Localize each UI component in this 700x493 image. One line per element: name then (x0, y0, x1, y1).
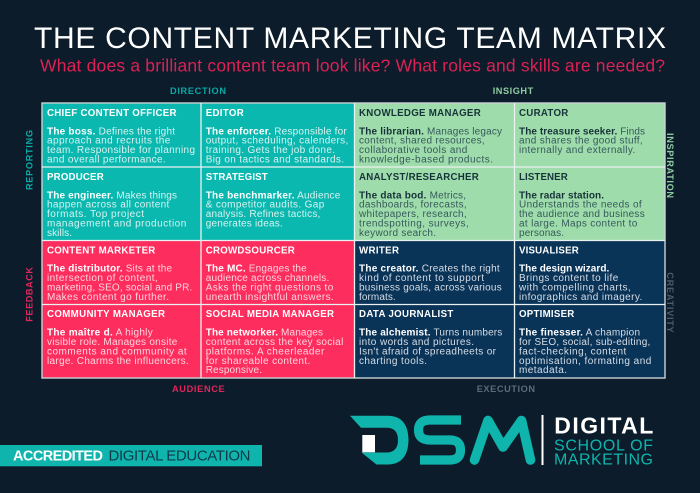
cell: content marketer: The distributor. Sits at the (47, 264, 172, 275)
cell: crowdsourcer: The MC. Engages the (206, 264, 307, 275)
quadrant: direction and reporting (42, 103, 354, 240)
cell: editor: output, scheduling, calenders, (206, 136, 348, 147)
cell: curator: CURATOR (519, 108, 568, 119)
cell: writer: kind of content to support (359, 273, 484, 284)
cell: optimiser: metadata. (519, 365, 567, 376)
cell: knowledge manager: knowledge-based products. (359, 154, 493, 166)
accreditation banner (0, 445, 262, 466)
cell: producer: The engineer. Makes things (47, 190, 177, 201)
cell: social media manager: content across the key social (206, 337, 343, 348)
cell: content marketer: intersection of content, (47, 273, 158, 284)
cell: listener: LISTENER (519, 172, 568, 183)
cell: knowledge manager: content, shared resources, (359, 136, 485, 147)
cell: crowdsourcer (206, 245, 334, 303)
cell: chief content officer: and overall performance. (47, 154, 166, 166)
cell: crowdsourcer: audience across channels. (206, 273, 329, 284)
cell: optimiser: for SEO, social, sub-editing, (519, 337, 650, 348)
cell: community manager: comments and community at (47, 346, 187, 358)
cell: data journalist: charting tools. (359, 356, 427, 367)
cell: strategist: STRATEGIST (206, 172, 268, 183)
cell: crowdsourcer: unearth insightful answers. (206, 292, 334, 303)
cell: producer: management and production (47, 218, 186, 229)
cell: visualiser: infographics and imagery. (519, 292, 642, 303)
cell: content marketer (47, 245, 192, 303)
axis label: audience: AUDIENCE (172, 384, 225, 394)
cell: strategist: The benchmarker. Audience (206, 190, 341, 201)
quadrant: insight and inspiration (354, 103, 665, 240)
cell: chief content officer: The boss. Defines the right (47, 126, 175, 138)
cell: producer: happen across all content (47, 200, 170, 211)
cell: social media manager: platforms. A cheerleader (206, 346, 325, 358)
cell: producer: PRODUCER (47, 172, 104, 183)
cell: visualiser: The design wizard. (519, 264, 610, 275)
axis label: feedback: FEEDBACK (25, 267, 35, 322)
cell: community manager: COMMUNITY MANAGER (47, 309, 165, 320)
cell: social media manager: for shareable content. (206, 356, 310, 367)
cell: listener: the audience and business (519, 209, 645, 220)
cell: editor: EDITOR (206, 108, 244, 119)
cell: chief content officer: team. Responsible for planning (47, 145, 195, 156)
quadrant: execution and creativity (354, 240, 665, 378)
cell: writer (359, 245, 502, 303)
cell: community manager: large. Charms the influencers. (47, 356, 189, 367)
axis label: reporting: REPORTING (25, 130, 35, 190)
cell: strategist: & competitor audits. Gap (206, 200, 325, 211)
axis label: inspiration: INSPIRATION (665, 133, 675, 198)
cell: writer: The creator. Creates the right (359, 264, 500, 275)
cell: social media manager (206, 309, 343, 376)
cell: producer (47, 172, 186, 239)
quadrant: audience and feedback (42, 240, 354, 378)
cell: editor: training. Gets the job done. (206, 145, 335, 156)
cell: data journalist: Isn't afraid of spreadheets or (359, 346, 497, 358)
axis label: execution: EXECUTION (477, 384, 535, 394)
cell: visualiser: VISUALISER (519, 245, 579, 256)
cell: strategist: generates ideas. (206, 218, 283, 229)
cell: analyst/researcher: keyword search. (359, 228, 436, 239)
cell: writer: business goals, across various (359, 282, 502, 294)
cell: crowdsourcer: Asks the right questions to (206, 282, 334, 294)
logo: digital school of marketing (350, 412, 653, 468)
cell: optimiser (519, 309, 651, 376)
logo: digital school of marketing: MARKETING (554, 452, 653, 468)
cell: knowledge manager: The librarian. Manages legacy (359, 126, 502, 138)
cell: optimiser: The finesser. A champion (519, 328, 640, 339)
axis label: creativity: CREATIVITY (665, 272, 675, 333)
cell: content marketer: CONTENT MARKETER (47, 245, 155, 256)
cell: strategist (206, 172, 341, 229)
cell: community manager (47, 309, 189, 367)
cell: visualiser: with compelling charts, (518, 282, 631, 294)
cell: content marketer: marketing, SEO, social and PR. (47, 282, 192, 294)
cell: optimiser: fact-checking, content (519, 346, 627, 358)
cell: optimiser: OPTIMISER (519, 309, 574, 320)
cell: analyst/researcher: The data bod. Metrics, (359, 190, 466, 201)
cell: data journalist: DATA JOURNALIST (359, 309, 453, 320)
cell: producer: skills. (47, 228, 72, 239)
cell: chief content officer: CHIEF CONTENT OFFICER (47, 108, 176, 119)
cell: visualiser: Brings content to life (519, 273, 619, 284)
cell: social media manager: Responsive. (206, 365, 262, 376)
cell: crowdsourcer: CROWDSOURCER (206, 245, 295, 256)
cell: data journalist (359, 309, 502, 367)
cell: curator (519, 108, 645, 156)
logo: digital school of marketing: SCHOOL OF (554, 437, 653, 454)
cell: social media manager: The networker. Manages (206, 328, 323, 339)
cell: editor (206, 108, 348, 166)
cell: community manager: visible role. Manages onsite (47, 337, 178, 348)
cell: chief content officer (47, 108, 195, 166)
cell: knowledge manager: collaborative tools and (359, 145, 467, 156)
cell: knowledge manager (359, 108, 502, 166)
cell: social media manager: SOCIAL MEDIA MANAGER (206, 309, 334, 320)
cell: editor: Big on tactics and standards. (206, 154, 344, 166)
cell: chief content officer: approach and recruits the (47, 136, 171, 147)
cell: optimiser: optimisation, formating and (519, 356, 651, 367)
cell: content marketer: Makes content go further. (47, 292, 169, 303)
cell: listener: The radar station. (519, 190, 604, 201)
cell: curator: internally and externally. (519, 145, 635, 156)
accreditation banner: ACCREDITED (13, 449, 103, 465)
cell: analyst/researcher: trendspotting, surveys, (359, 218, 469, 229)
cell: data journalist: The alchemist. Turns numbers (359, 328, 502, 339)
cell: listener: Understands the needs of (519, 200, 642, 211)
accreditation banner: DIGITAL EDUCATION (108, 448, 250, 465)
cell: community manager: The maître d. A highly (47, 328, 153, 339)
logo: digital school of marketing: DIGITAL (554, 412, 653, 438)
subtitle: What does a brilliant content team look like? What roles and skills are needed? (40, 56, 665, 76)
icon: DSM mark (350, 416, 530, 464)
cell: listener (519, 172, 645, 239)
cell: analyst/researcher (358, 172, 479, 239)
cell: producer: formats. Top project (47, 209, 144, 220)
cell: listener: personas. (519, 228, 564, 239)
matrix (42, 103, 665, 378)
cell: writer: WRITER (359, 245, 399, 256)
cell: curator: and shares the good stuff, (519, 136, 643, 147)
cell: data journalist: into words and pictures. (359, 337, 474, 348)
axis label: insight: INSIGHT (493, 86, 534, 96)
axis label: direction: DIRECTION (170, 86, 226, 96)
cell: writer: formats. (359, 292, 396, 303)
cell: analyst/researcher: whitepapers, research, (358, 209, 467, 220)
cell: knowledge manager: KNOWLEDGE MANAGER (359, 108, 481, 119)
cell: visualiser (518, 245, 642, 303)
cell: editor: The enforcer. Responsible for (206, 126, 347, 138)
cell: strategist: analysis. Refines tactics, (206, 209, 320, 220)
cell: analyst/researcher: dashboards, forecasts, (359, 200, 467, 211)
cell: analyst/researcher: ANALYST/RESEARCHER (359, 172, 479, 183)
cell: curator: The treasure seeker. Finds (519, 126, 645, 138)
cell: listener: at large. Maps content to (519, 218, 638, 229)
title: THE CONTENT MARKETING TEAM MATRIX (34, 22, 666, 55)
